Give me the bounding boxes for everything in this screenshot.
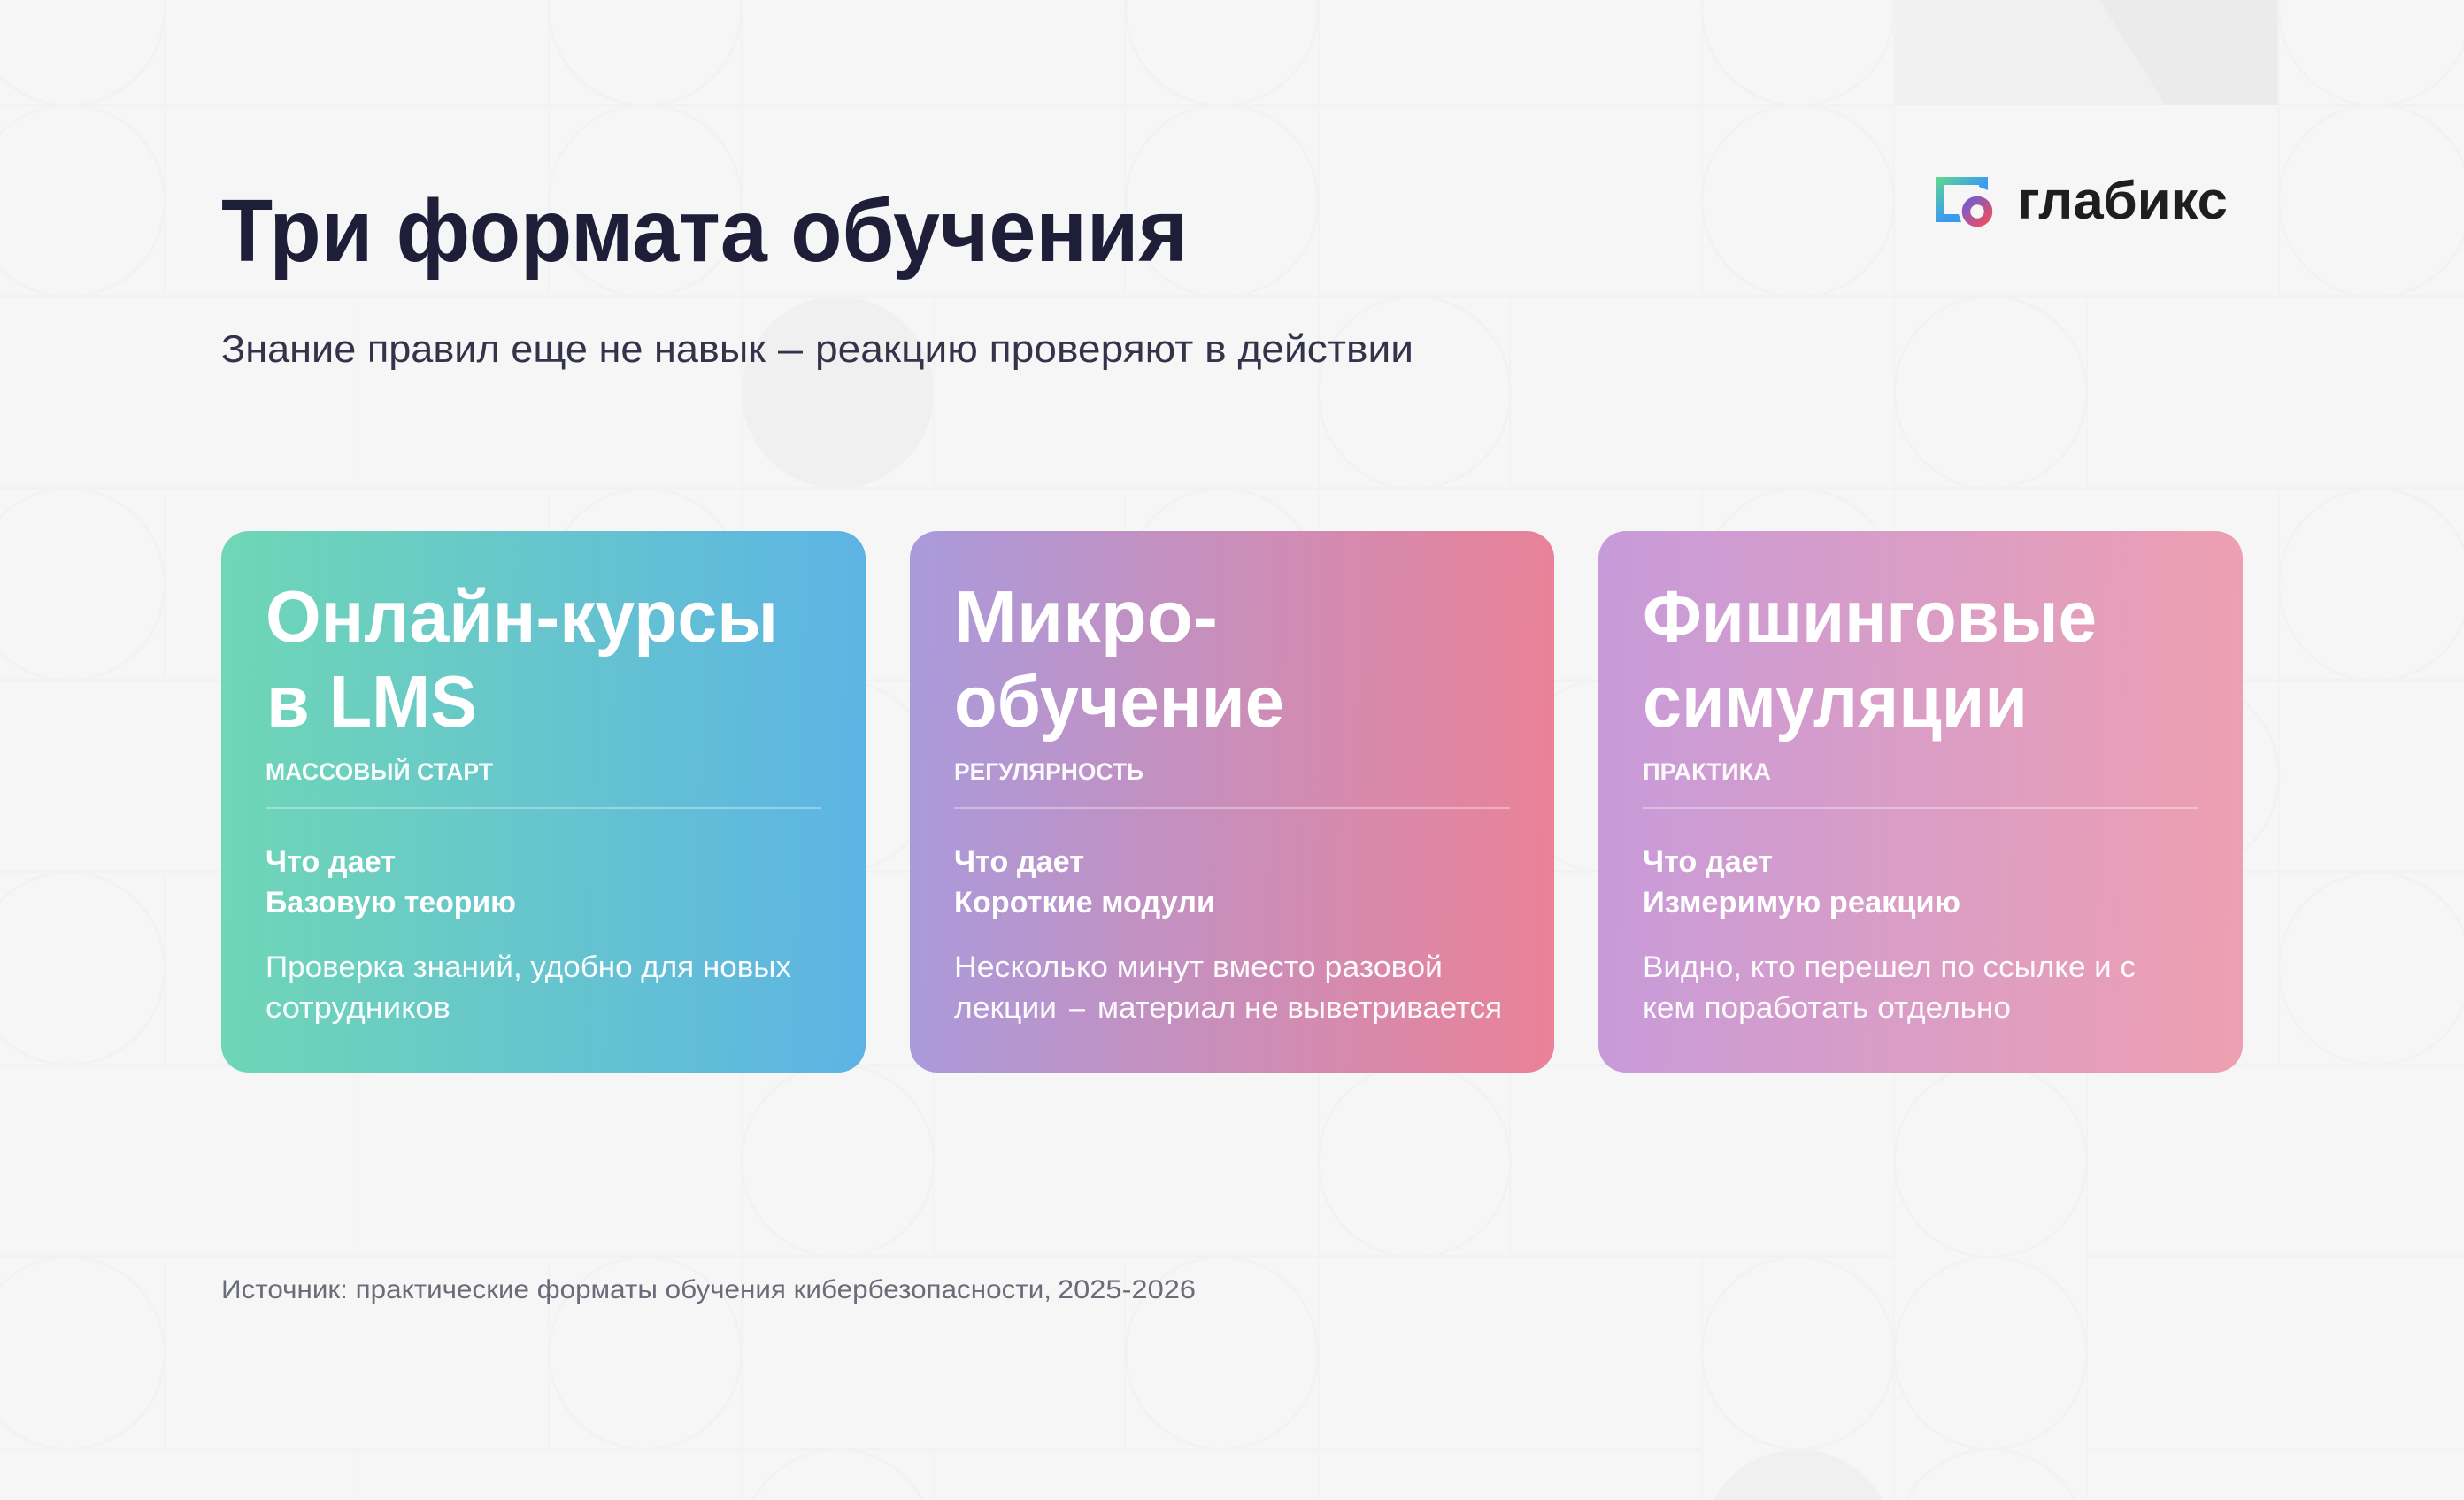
- icon: logo mark: [1936, 177, 1988, 223]
- card description: [266, 950, 791, 1025]
- card heading: в LMS: [266, 660, 477, 742]
- subtitle: Знание правил еще не навык: [221, 327, 766, 371]
- card tag: ПРАКТИКА: [1643, 758, 1771, 785]
- card description: [1643, 950, 2136, 1025]
- subtitle: [221, 327, 1413, 371]
- card benefit: Базовую теорию: [266, 886, 516, 919]
- card benefit: [266, 845, 516, 919]
- panel: фишинговые симуляции: [1598, 531, 2243, 1073]
- title: Три формата обучения: [221, 181, 1188, 281]
- card description: Видно, кто перешел по ссылке и с: [1643, 950, 2136, 984]
- card description: материал не выветривается: [1097, 991, 1502, 1025]
- card benefit: Что дает: [266, 845, 396, 879]
- card heading: Онлайн-курсы: [266, 575, 778, 658]
- card benefit: Что дает: [1643, 845, 1773, 879]
- card heading: Фишинговые: [1643, 575, 2097, 658]
- card heading: [1643, 575, 2097, 742]
- card description: Несколько минут вместо разовой: [954, 950, 1443, 984]
- card heading: Микро-: [954, 575, 1218, 658]
- card description: кем поработать отдельно: [1643, 991, 2011, 1025]
- card heading: [954, 575, 1284, 742]
- card tag: МАССОВЫЙ СТАРТ: [266, 758, 493, 785]
- card benefit: [1643, 845, 1960, 919]
- card benefit: [954, 845, 1215, 919]
- card benefit: Короткие модули: [954, 886, 1215, 919]
- source note: Источник: практические форматы обучения кибербезопасности,: [221, 1275, 1051, 1304]
- card benefit: Измеримую реакцию: [1643, 886, 1960, 919]
- card tag: РЕГУЛЯРНОСТЬ: [954, 758, 1143, 785]
- card description: сотрудников: [266, 991, 450, 1025]
- card description: —: [1069, 991, 1085, 1025]
- card heading: [266, 575, 778, 742]
- logo wordmark: глабикс: [2017, 171, 2228, 230]
- card description: лекции: [954, 991, 1057, 1025]
- card heading: обучение: [954, 660, 1284, 742]
- card benefit: Что дает: [954, 845, 1084, 879]
- card description: [954, 950, 1502, 1025]
- card description: Проверка знаний, удобно для новых: [266, 950, 791, 984]
- panel: микрообучение: [910, 531, 1554, 1073]
- card heading: симуляции: [1643, 660, 2028, 742]
- subtitle: —: [778, 327, 803, 371]
- subtitle: реакцию проверяют в действии: [815, 327, 1413, 371]
- source note: 2025-2026: [1058, 1275, 1196, 1304]
- logo: глабикс: [1936, 171, 2228, 230]
- panel: онлайн-курсы в LMS: [221, 531, 866, 1073]
